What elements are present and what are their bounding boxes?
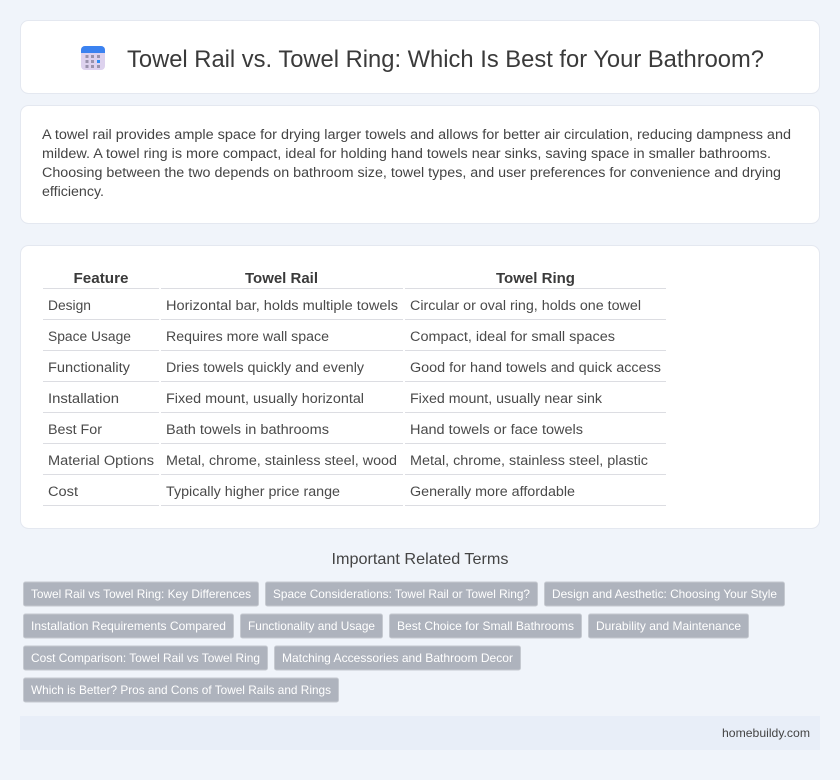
table rows: Material Options	[48, 453, 154, 469]
tag: Towel Rail vs Towel Ring: Key Differences	[31, 587, 251, 601]
tag: Durability and Maintenance	[596, 619, 741, 633]
tag: Installation Requirements Compared	[31, 619, 226, 633]
table rows: Requires more wall space	[166, 329, 329, 345]
tag	[24, 614, 234, 638]
intro text: efficiency.	[42, 184, 104, 200]
related term tags	[24, 582, 784, 702]
footer	[20, 716, 820, 750]
icon: calendar	[81, 46, 105, 70]
table rows: Space Usage	[48, 329, 131, 345]
tag: Design and Aesthetic: Choosing Your Style	[552, 587, 777, 601]
tag: Space Considerations: Towel Rail or Towel Ring?	[273, 587, 530, 601]
table header	[74, 271, 575, 287]
panel: comparison table	[20, 246, 820, 528]
tag	[240, 614, 382, 638]
table header: Towel Ring	[496, 271, 575, 287]
tag: Best Choice for Small Bathrooms	[397, 619, 574, 633]
table rows: Installation	[48, 391, 119, 407]
tag	[274, 646, 520, 670]
table header: Feature	[74, 271, 128, 287]
tag	[390, 614, 582, 638]
tag	[588, 614, 748, 638]
table rows: Circular or oval ring, holds one towel	[410, 298, 641, 314]
panel: introduction	[20, 106, 820, 224]
footer text: homebuildy.com	[722, 726, 810, 740]
intro text	[42, 127, 791, 200]
table rows: Horizontal bar, holds multiple towels	[166, 298, 398, 314]
table rows: Metal, chrome, stainless steel, wood	[166, 453, 397, 469]
table rows: Typically higher price range	[166, 484, 340, 500]
tag: Which is Better? Pros and Cons of Towel Rails and Rings	[31, 683, 331, 697]
table rows: Hand towels or face towels	[410, 422, 583, 438]
panel: header	[20, 20, 820, 94]
tag: Functionality and Usage	[248, 619, 375, 633]
table grid lines	[43, 288, 666, 506]
table rows: Fixed mount, usually horizontal	[166, 391, 364, 407]
table rows: Compact, ideal for small spaces	[410, 329, 615, 345]
table rows: Generally more affordable	[410, 484, 575, 500]
tag	[544, 582, 784, 606]
table rows: Cost	[48, 484, 78, 500]
tag	[24, 582, 258, 606]
table rows: Good for hand towels and quick access	[410, 360, 661, 376]
table rows: Best For	[48, 422, 102, 438]
table rows: Design	[48, 298, 91, 314]
table rows	[48, 298, 661, 500]
intro text: Choosing between the two depends on bathroom size, towel types, and user preferences for convenience and drying	[42, 165, 781, 181]
tag: Cost Comparison: Towel Rail vs Towel Ring	[31, 651, 260, 665]
table rows: Dries towels quickly and evenly	[166, 360, 365, 376]
tag	[266, 582, 538, 606]
intro text: A towel rail provides ample space for drying larger towels and allows for better air circulation, reducing dampness and	[42, 127, 791, 143]
tag	[24, 678, 338, 702]
table rows: Fixed mount, usually near sink	[410, 391, 603, 407]
tag: Matching Accessories and Bathroom Decor	[282, 651, 513, 665]
table header: Towel Rail	[245, 271, 318, 287]
table rows: Bath towels in bathrooms	[166, 422, 329, 438]
intro text: mildew. A towel ring is more compact, ideal for holding hand towels near sinks, saving space in smaller bathrooms.	[42, 146, 771, 162]
heading: related terms: Important Related Terms	[332, 551, 508, 568]
table rows: Functionality	[48, 360, 131, 376]
tag	[24, 646, 268, 670]
title: Towel Rail vs. Towel Ring: Which Is Best for Your Bathroom?	[127, 46, 764, 73]
table rows: Metal, chrome, stainless steel, plastic	[410, 453, 648, 469]
